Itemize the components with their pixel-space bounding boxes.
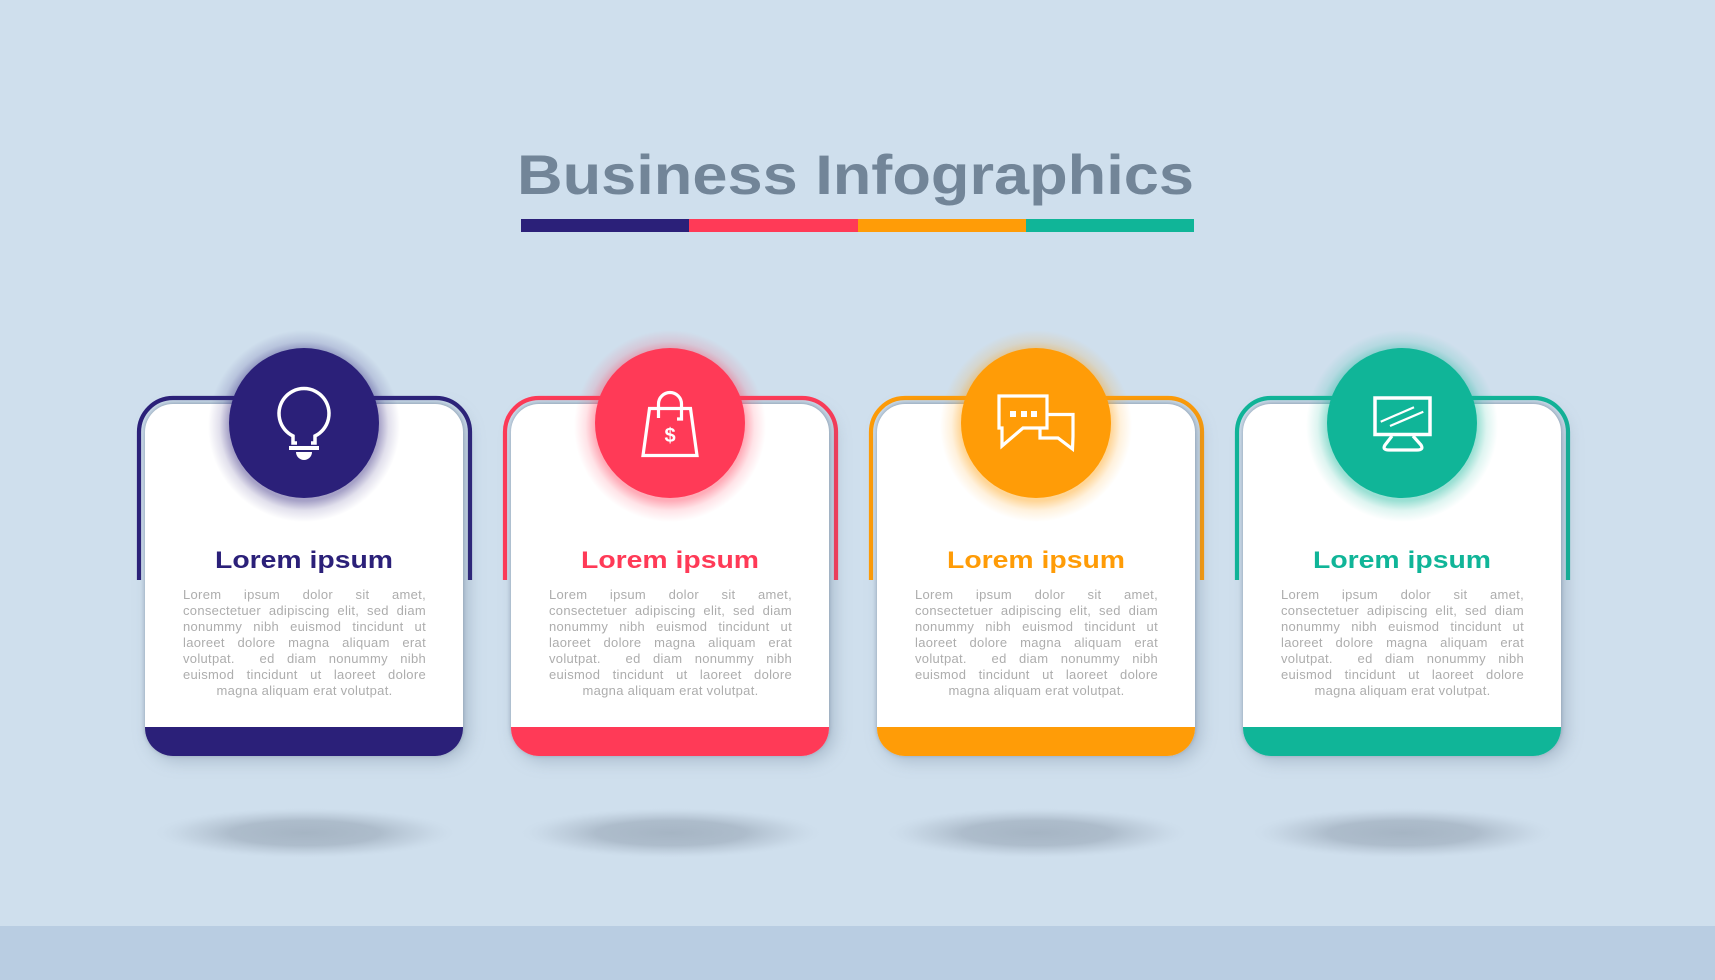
floor shadow: [887, 808, 1187, 858]
floor shadow: [155, 808, 455, 858]
card body text: consectetuer adipiscing elit, sed diam: [915, 603, 1158, 618]
icon circle: [229, 348, 379, 498]
icon: computer monitor: [1375, 398, 1430, 450]
card body text: consectetuer adipiscing elit, sed diam: [1281, 603, 1524, 618]
bottom band: [0, 926, 1715, 980]
card body text: Lorem ipsum dolor sit amet,: [1281, 587, 1524, 602]
card body text: magna aliquam erat volutpat.: [948, 683, 1125, 698]
card body text: volutpat. ed diam nonummy nibh: [549, 651, 792, 666]
icon: shopping bag: [643, 392, 697, 456]
card body text: [549, 587, 792, 698]
panel: card 1: [136, 334, 474, 854]
card outline: [871, 398, 1202, 580]
card body text: laoreet dolore magna aliquam erat: [1281, 635, 1524, 650]
card body text: Lorem ipsum dolor sit amet,: [915, 587, 1158, 602]
card body text: consectetuer adipiscing elit, sed diam: [549, 603, 792, 618]
white card: [877, 404, 1195, 756]
icon: light bulb: [279, 389, 329, 460]
card outline: [139, 398, 470, 580]
circle glow: [1306, 330, 1498, 522]
icon circle: [595, 348, 745, 498]
circle glow: [208, 330, 400, 522]
white card: [1243, 404, 1561, 756]
card outline: [1237, 398, 1568, 580]
card body text: laoreet dolore magna aliquam erat: [183, 635, 426, 650]
circle glow: [574, 330, 766, 522]
card body text: euismod tincidunt ut laoreet dolore: [183, 667, 426, 682]
bottom bar: [877, 727, 1195, 756]
card body text: laoreet dolore magna aliquam erat: [915, 635, 1158, 650]
icon circle: [1327, 348, 1477, 498]
card body text: magna aliquam erat volutpat.: [582, 683, 759, 698]
circle glow: [940, 330, 1132, 522]
card outline: [505, 398, 836, 580]
card body text: volutpat. ed diam nonummy nibh: [915, 651, 1158, 666]
card heading: Lorem ipsum: [581, 547, 759, 574]
card body text: euismod tincidunt ut laoreet dolore: [1281, 667, 1524, 682]
card body text: nonummy nibh euismod tincidunt ut: [915, 619, 1158, 634]
icon circle: [961, 348, 1111, 498]
title underline colour bar: [521, 219, 1194, 232]
card body text: [1281, 587, 1524, 698]
card body text: magna aliquam erat volutpat.: [1314, 683, 1491, 698]
card body text: laoreet dolore magna aliquam erat: [549, 635, 792, 650]
panel: card 2: [502, 334, 840, 854]
card heading: Lorem ipsum: [215, 547, 393, 574]
card body text: Lorem ipsum dolor sit amet,: [183, 587, 426, 602]
white card: [511, 404, 829, 756]
panel: card 3: [868, 333, 1206, 854]
bottom bar: [145, 727, 463, 756]
card body text: volutpat. ed diam nonummy nibh: [183, 651, 426, 666]
floor shadow: [521, 808, 821, 858]
card body text: consectetuer adipiscing elit, sed diam: [183, 603, 426, 618]
card body text: euismod tincidunt ut laoreet dolore: [549, 667, 792, 682]
card body text: [183, 587, 426, 698]
icon: shopping bag: $: [664, 425, 676, 447]
bottom bar: [1243, 727, 1561, 756]
card body text: euismod tincidunt ut laoreet dolore: [915, 667, 1158, 682]
card body text: magna aliquam erat volutpat.: [216, 683, 393, 698]
title: Business Infographics: [517, 143, 1194, 206]
white card: [145, 404, 463, 756]
card heading: Lorem ipsum: [1313, 547, 1491, 574]
card body text: nonummy nibh euismod tincidunt ut: [549, 619, 792, 634]
card heading: Lorem ipsum: [947, 547, 1125, 574]
card body text: nonummy nibh euismod tincidunt ut: [183, 619, 426, 634]
floor shadow: [1253, 808, 1553, 858]
bottom bar: [511, 727, 829, 756]
panel: card 4: [1234, 334, 1572, 854]
card body text: nonummy nibh euismod tincidunt ut: [1281, 619, 1524, 634]
icon: chat bubbles: [999, 396, 1073, 449]
card body text: [915, 587, 1158, 698]
card body text: volutpat. ed diam nonummy nibh: [1281, 651, 1524, 666]
card body text: Lorem ipsum dolor sit amet,: [549, 587, 792, 602]
